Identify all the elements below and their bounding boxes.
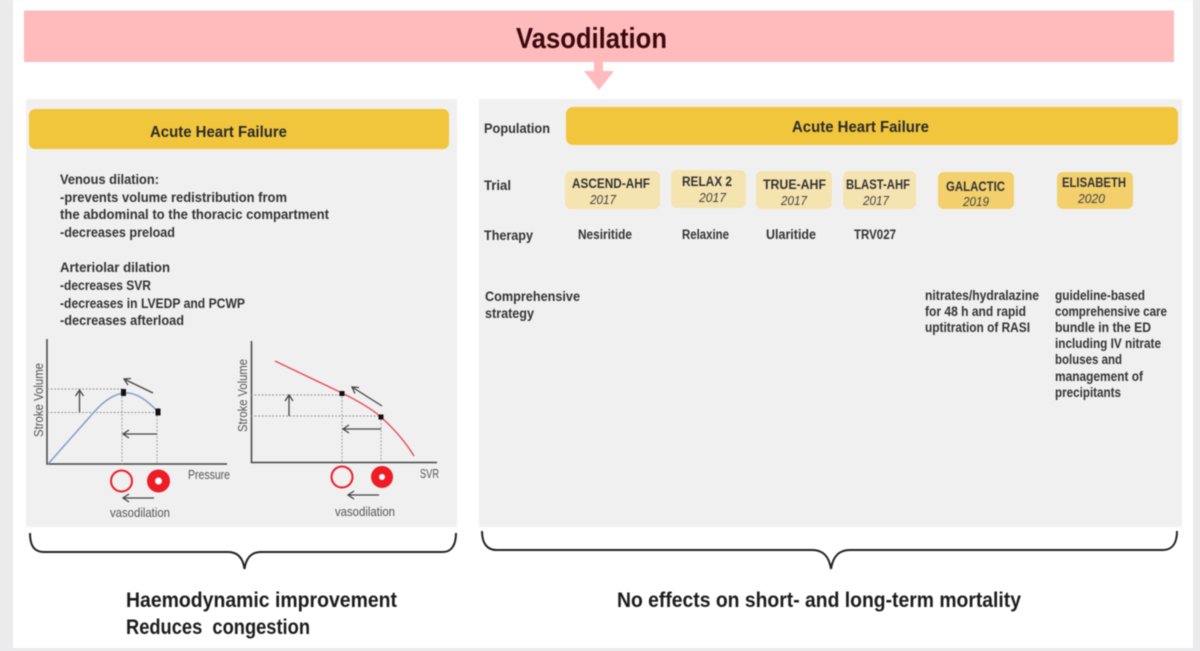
text block: venous dilation <box>60 172 329 240</box>
text block: arteriolar dilation: -decreases in LVEDP and PCWP <box>60 296 245 311</box>
strategy: ELISABETH: bundle in the ED <box>1055 320 1151 335</box>
strategy: ELISABETH: boluses and <box>1055 352 1122 367</box>
trial: BLAST-AHF 2017 <box>843 171 916 209</box>
trial: ASCEND-AHF 2017: ASCEND-AHF <box>572 176 650 191</box>
panel: clinical trials <box>479 99 1182 527</box>
text block: arteriolar dilation <box>60 260 245 328</box>
trial: TRUE-AHF 2017 <box>756 171 832 209</box>
trial: ASCEND-AHF 2017 <box>565 171 660 209</box>
population header: Acute Heart Failure <box>566 107 1178 145</box>
row labels <box>484 121 580 321</box>
therapies: TRV027 <box>854 227 896 242</box>
chart: stroke volume vs pressure: Pressure <box>188 468 230 482</box>
strategy: ELISABETH: comprehensive care <box>1055 304 1167 319</box>
population header: Acute Heart Failure: Acute Heart Failure <box>792 119 929 136</box>
trial: RELAX 2 2017: 2017 <box>698 190 727 205</box>
text block: arteriolar dilation: -decreases afterload <box>60 313 184 328</box>
trial: TRUE-AHF 2017: 2017 <box>780 193 808 208</box>
trial: BLAST-AHF 2017: 2017 <box>862 193 890 208</box>
chart: stroke volume vs pressure <box>32 339 230 520</box>
therapies: Ularitide <box>766 227 816 242</box>
trial: ELISABETH 2020: ELISABETH <box>1062 175 1126 190</box>
trial: TRUE-AHF 2017: TRUE-AHF <box>763 177 826 192</box>
outcome: haemodynamic improvement: Reduces congestion <box>126 616 310 639</box>
brace: right panel <box>482 531 1177 569</box>
strategy: GALACTIC <box>925 288 1039 335</box>
trial: ELISABETH 2020: 2020 <box>1077 191 1106 206</box>
strategy: GALACTIC: nitrates/hydralazine <box>925 288 1039 303</box>
title banner: Vasodilation <box>24 10 1174 62</box>
strategy: ELISABETH: precipitants <box>1055 385 1121 400</box>
strategy: ELISABETH: including IV nitrate <box>1055 336 1161 351</box>
chart: stroke volume vs SVR: Stroke Volume <box>236 359 250 432</box>
population header: Acute Heart Failure: Acute Heart Failure <box>150 124 287 141</box>
trial: GALACTIC 2019: GALACTIC <box>946 179 1005 194</box>
chart: stroke volume vs SVR: SVR <box>420 467 439 481</box>
strategy: GALACTIC: uptitration of RASI <box>925 320 1030 335</box>
trial: GALACTIC 2019 <box>938 172 1014 209</box>
row labels: Comprehensive <box>485 289 580 304</box>
text block: venous dilation: Venous dilation: <box>60 172 159 187</box>
chart: stroke volume vs SVR <box>236 341 439 519</box>
row labels: Trial <box>484 178 511 193</box>
text block: arteriolar dilation: -decreases SVR <box>60 278 151 293</box>
chart: stroke volume vs pressure: Stroke Volume <box>32 363 46 437</box>
text block: arteriolar dilation: Arteriolar dilation <box>60 260 170 275</box>
therapies: Nesiritide <box>578 227 632 242</box>
trial: ASCEND-AHF 2017: 2017 <box>589 192 617 207</box>
chart: stroke volume vs SVR: vasodilation <box>335 505 395 519</box>
trial: BLAST-AHF 2017: BLAST-AHF <box>846 177 910 192</box>
outcome: mortality: No effects on short- and long-term mortality <box>617 589 1021 612</box>
therapies <box>578 227 896 242</box>
text block: venous dilation: the abdominal to the thoracic compartment <box>60 207 329 222</box>
title banner: Vasodilation: Vasodilation <box>516 23 667 55</box>
row labels: Therapy <box>484 228 533 243</box>
panel: haemodynamic effects <box>26 99 457 527</box>
trial: RELAX 2 2017: RELAX 2 <box>682 174 732 189</box>
trial: GALACTIC 2019: 2019 <box>962 194 989 209</box>
trial: ELISABETH 2020 <box>1057 172 1133 209</box>
population header: Acute Heart Failure <box>29 109 449 149</box>
strategy: GALACTIC: for 48 h and rapid <box>925 304 1026 319</box>
brace: left panel <box>30 533 456 569</box>
arrow: banner down to panels <box>584 62 614 90</box>
strategy: ELISABETH: guideline-based <box>1055 288 1145 303</box>
text block: venous dilation: -prevents volume redistribution from <box>60 190 287 205</box>
text block: venous dilation: -decreases preload <box>60 225 175 240</box>
chart: stroke volume vs pressure: vasodilation <box>110 506 170 520</box>
row labels: strategy <box>485 306 534 321</box>
strategy: ELISABETH: management of <box>1055 369 1143 384</box>
outcome: haemodynamic improvement <box>126 589 397 639</box>
therapies: Relaxine <box>682 227 729 242</box>
trial: RELAX 2 2017 <box>671 170 746 208</box>
strategy: ELISABETH <box>1055 288 1167 400</box>
outcome: haemodynamic improvement: Haemodynamic improvement <box>126 589 397 612</box>
row labels: Population <box>484 121 550 136</box>
